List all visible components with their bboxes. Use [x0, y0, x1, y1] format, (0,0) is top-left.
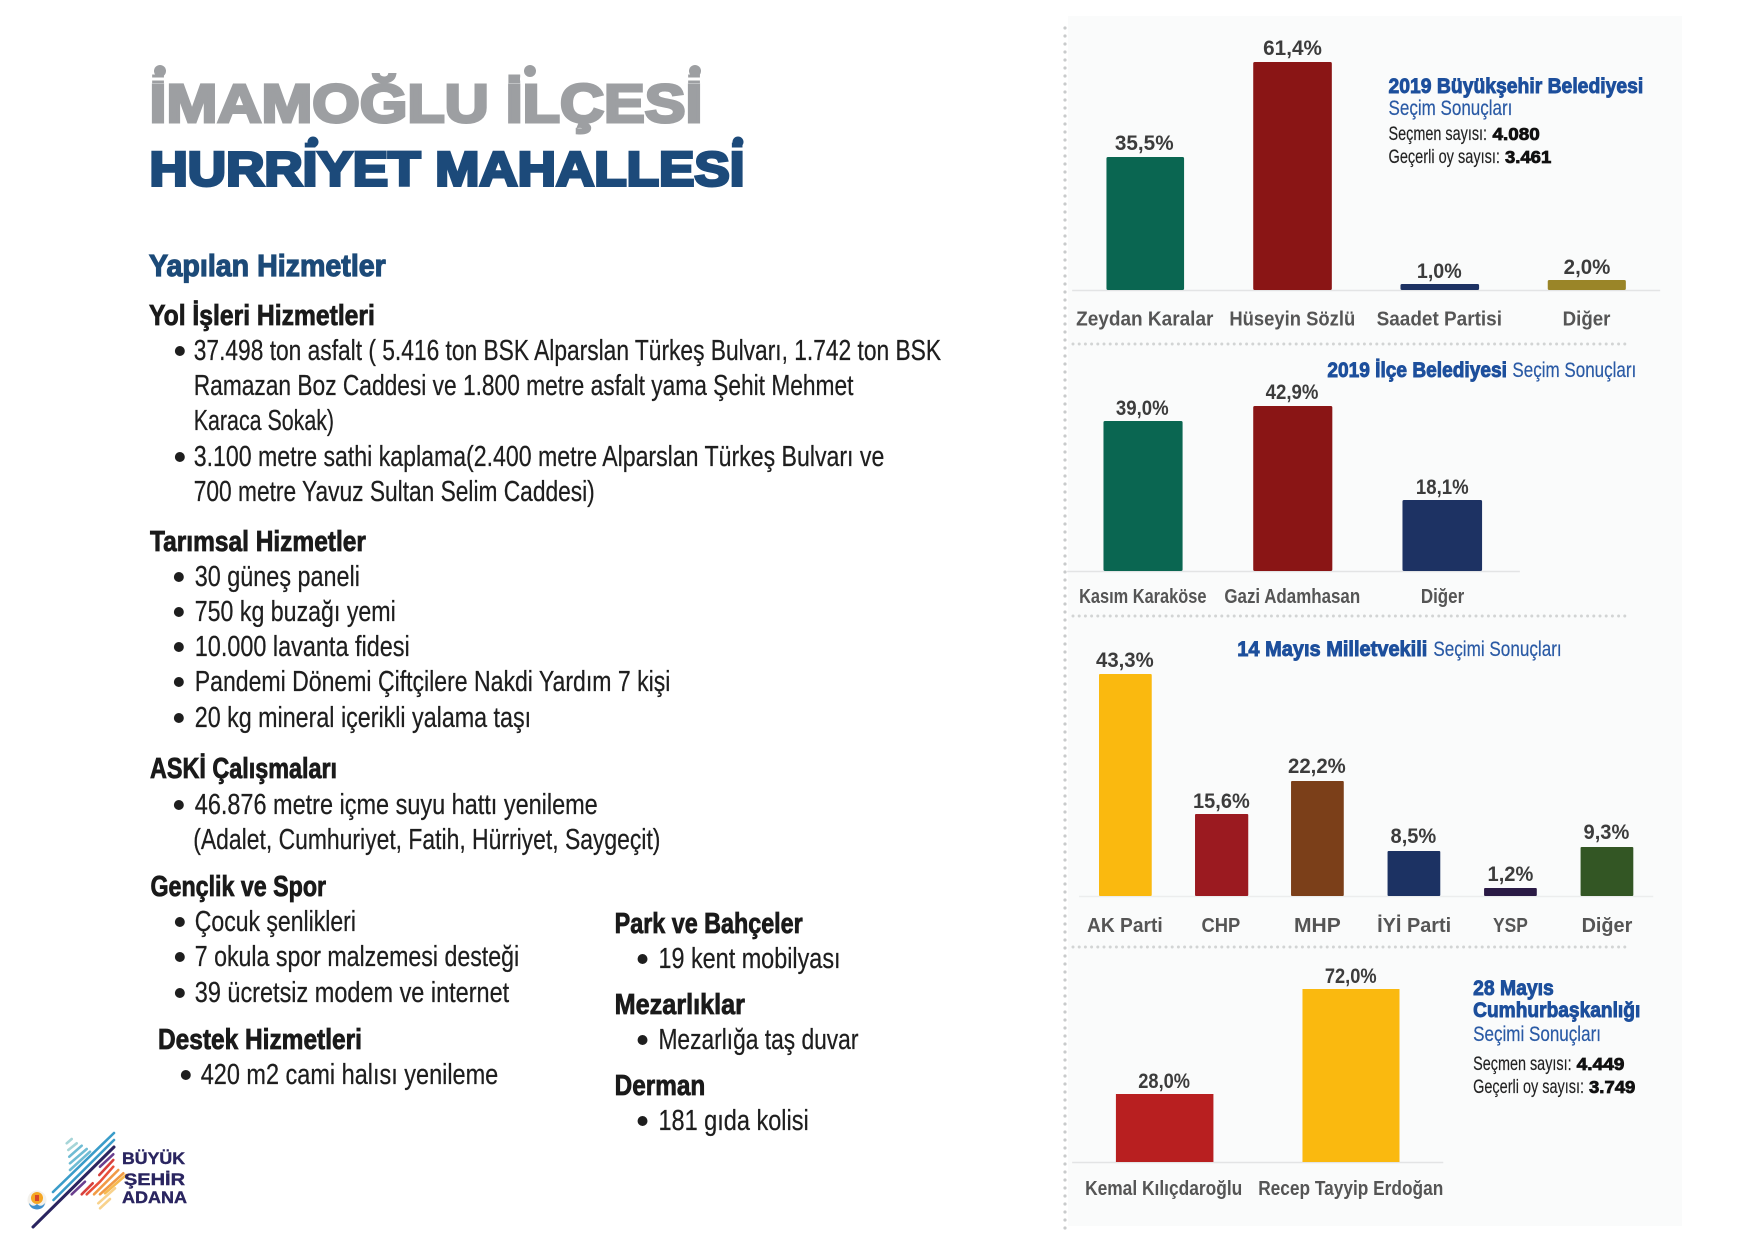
section: Gençlik ve Spor: Gençlik ve Spor [150, 871, 326, 903]
bar: Kemal Kılıçdaroğlu: Kemal Kılıçdaroğlu [1085, 1178, 1242, 1200]
bar: Zeydan Karalar: 35,5% [1115, 132, 1174, 155]
section: Mezarlıklar: Mezarlıklar [615, 989, 745, 1021]
section: Tarımsal Hizmetler: 10.000 lavanta fidesi [195, 631, 410, 663]
bar: Saadet Partisi: Saadet Partisi [1377, 308, 1502, 331]
section: Tarımsal Hizmetler: 750 kg buzağı yemi [195, 596, 396, 628]
bar: YSP: 1,2% [1488, 863, 1534, 886]
chart heading and voter counts: 4.449 [1577, 1054, 1624, 1074]
bar: Hüseyin Sözlü [1229, 37, 1355, 331]
panel: election results background [1068, 16, 1682, 1226]
panel: services list [149, 248, 941, 1137]
icon: striped star [33, 1133, 126, 1227]
section: Derman: 181 gıda kolisi [658, 1105, 809, 1137]
section: Yol İşleri Hizmetleri: 3.100 metre sathi kaplama(2.400 metre Alparslan Türkeş Bulvarı ve [194, 441, 884, 473]
section: Yol İşleri Hizmetleri: Yol İşleri Hizmetleri [149, 299, 375, 332]
section: Gençlik ve Spor: Çocuk şenlikleri [195, 906, 356, 938]
bar: Diğer: 9,3% [1584, 821, 1630, 844]
bar: Kasım Karaköse [1079, 397, 1206, 608]
chart heading and voter counts: Geçerli oy sayısı: [1389, 147, 1500, 168]
section: Derman: Derman [615, 1070, 705, 1102]
chart: 28 Mayıs Cumhurbaşkanlığı [1072, 965, 1640, 1200]
bar: Diğer: Diğer [1563, 308, 1611, 331]
section: Derman [615, 1070, 809, 1137]
section: Park ve Bahçeler [615, 908, 841, 975]
logo wordmark [122, 1149, 187, 1207]
bar: Recep Tayyip Erdoğan: Recep Tayyip Erdoğan [1258, 1178, 1443, 1200]
bar: MHP [1288, 755, 1346, 937]
bar: Diğer [1581, 821, 1633, 937]
bar: CHP: CHP [1201, 915, 1240, 937]
logo wordmark: ADANA [122, 1188, 187, 1207]
chart heading and voter counts: Seçmen sayısı: [1473, 1054, 1572, 1075]
chart heading and voter counts: Seçim Sonuçları [1389, 97, 1512, 120]
section: ASKİ Çalışmaları: 46.876 metre içme suyu hattı yenileme [195, 789, 598, 821]
bar: Zeydan Karalar: Zeydan Karalar [1076, 308, 1214, 331]
heading: Yapılan Hizmetler: Yapılan Hizmetler [149, 248, 386, 283]
bar: CHP: 15,6% [1193, 790, 1250, 813]
chart heading and voter counts: 3.749 [1589, 1077, 1635, 1097]
chart: 2019 İlçe Belediyesi [1067, 359, 1636, 608]
section: ASKİ Çalışmaları: (Adalet, Cumhuriyet, Fatih, Hürriyet, Saygeçit) [193, 824, 660, 856]
title: İMAMOĞLU İLÇESİ [150, 74, 702, 134]
bar: İYİ Parti: 8,5% [1391, 825, 1437, 848]
section: ASKİ Çalışmaları: ASKİ Çalışmaları [150, 752, 337, 785]
chart heading and voter counts: Seçmen sayısı: [1389, 124, 1487, 145]
section: Yol İşleri Hizmetleri: 700 metre Yavuz Sultan Selim Caddesi) [194, 476, 595, 508]
logo wordmark: BÜYÜK [122, 1149, 186, 1168]
bar: İYİ Parti: İYİ Parti [1377, 914, 1451, 937]
bar: Gazi Adamhasan [1224, 381, 1360, 608]
section: ASKİ Çalışmaları [150, 752, 660, 856]
title [150, 65, 747, 196]
bar: MHP: MHP [1294, 915, 1341, 937]
bar: Diğer: Diğer [1582, 915, 1633, 937]
bar: MHP: 22,2% [1288, 755, 1346, 778]
bar: Diğer [1402, 476, 1482, 608]
section: Park ve Bahçeler: 19 kent mobilyası [658, 943, 841, 975]
chart heading and voter counts: 3.461 [1505, 147, 1551, 167]
section: Tarımsal Hizmetler: Tarımsal Hizmetler [150, 526, 366, 558]
bar: AK Parti: 43,3% [1096, 649, 1154, 672]
bar: Zeydan Karalar [1076, 132, 1214, 331]
bar: Kemal Kılıçdaroğlu [1085, 1070, 1242, 1200]
section: Mezarlıklar [615, 989, 858, 1056]
bar: CHP [1193, 790, 1250, 937]
chart heading: 14 Mayıs Milletvekili [1237, 638, 1427, 661]
chart heading and voter counts [1473, 977, 1640, 1098]
bar: Recep Tayyip Erdoğan [1258, 965, 1443, 1200]
section: Tarımsal Hizmetler: 30 güneş paneli [195, 561, 360, 593]
chart: 2019 Büyükşehir Belediyesi [1072, 37, 1660, 331]
icon: municipality emblem [28, 1190, 46, 1210]
panel: election charts [1067, 37, 1660, 1200]
bar: YSP: YSP [1493, 915, 1528, 937]
chart heading: Seçimi Sonuçları [1433, 638, 1562, 661]
section: Gençlik ve Spor [150, 871, 519, 1009]
bar: Diğer: 18,1% [1416, 476, 1469, 499]
logo: Büyükşehir Adana [28, 1133, 187, 1227]
chart heading: Seçim Sonuçları [1512, 359, 1636, 382]
bar: Saadet Partisi [1377, 260, 1502, 331]
bar: Kemal Kılıçdaroğlu: 28,0% [1138, 1070, 1190, 1093]
title: HURRİYET MAHALLESİ [150, 144, 744, 196]
chart heading and voter counts: 2019 Büyükşehir Belediyesi [1389, 75, 1643, 98]
section: Yol İşleri Hizmetleri [149, 299, 941, 508]
bar: Gazi Adamhasan: Gazi Adamhasan [1224, 586, 1360, 608]
chart heading: 2019 İlçe Belediyesi [1327, 359, 1507, 382]
section: Tarımsal Hizmetler: 20 kg mineral içerikli yalama taşı [195, 702, 531, 734]
chart: 14 Mayıs Milletvekili [1079, 638, 1653, 937]
bar: Kasım Karaköse: Kasım Karaköse [1079, 586, 1206, 608]
section: Tarımsal Hizmetler [150, 526, 670, 734]
bar: Kasım Karaköse: 39,0% [1116, 397, 1169, 420]
chart heading and voter counts: Seçimi Sonuçları [1473, 1023, 1601, 1046]
chart heading and voter counts: Geçerli oy sayısı: [1473, 1077, 1584, 1098]
chart heading [1237, 638, 1562, 661]
chart heading and voter counts [1389, 75, 1643, 168]
logo wordmark: ŞEHİR [124, 1170, 185, 1189]
section: Gençlik ve Spor: 39 ücretsiz modem ve internet [195, 977, 509, 1009]
bar: AK Parti [1087, 649, 1163, 937]
bar: Saadet Partisi: 1,0% [1417, 260, 1462, 283]
section: Destek Hizmetleri: 420 m2 cami halısı yenileme [201, 1059, 498, 1091]
section: Destek Hizmetleri [158, 1024, 498, 1091]
bar: Hüseyin Sözlü: 61,4% [1263, 37, 1322, 60]
chart heading [1327, 359, 1636, 382]
bar: YSP [1484, 863, 1537, 937]
section: Mezarlıklar: Mezarlığa taş duvar [658, 1024, 858, 1056]
section: Destek Hizmetleri: Destek Hizmetleri [158, 1024, 362, 1056]
bar: Diğer: Diğer [1421, 586, 1464, 608]
bar: Gazi Adamhasan: 42,9% [1266, 381, 1319, 404]
bar: Recep Tayyip Erdoğan: 72,0% [1325, 965, 1377, 988]
chart heading and voter counts: 4.080 [1493, 124, 1540, 144]
section: Park ve Bahçeler: Park ve Bahçeler [615, 908, 803, 940]
section: Tarımsal Hizmetler: Pandemi Dönemi Çiftçilere Nakdi Yardım 7 kişi [195, 666, 670, 698]
chart heading and voter counts: Cumhurbaşkanlığı [1473, 999, 1640, 1022]
chart heading and voter counts: 28 Mayıs [1473, 977, 1554, 1000]
section: Yol İşleri Hizmetleri: Karaca Sokak) [194, 405, 334, 437]
section: Gençlik ve Spor: 7 okula spor malzemesi desteği [195, 941, 519, 973]
section: Yol İşleri Hizmetleri: 37.498 ton asfalt ( 5.416 ton BSK Alparslan Türkeş Bulvarı, 1.742 ton BSK [194, 335, 941, 367]
bar: İYİ Parti [1377, 825, 1451, 937]
bar: Diğer: 2,0% [1564, 256, 1611, 279]
bar: AK Parti: AK Parti [1087, 915, 1163, 937]
bar: Hüseyin Sözlü: Hüseyin Sözlü [1229, 308, 1355, 331]
section: Yol İşleri Hizmetleri: Ramazan Boz Caddesi ve 1.800 metre asfalt yama Şehit Mehmet [194, 370, 854, 402]
bar: Diğer [1548, 256, 1626, 331]
